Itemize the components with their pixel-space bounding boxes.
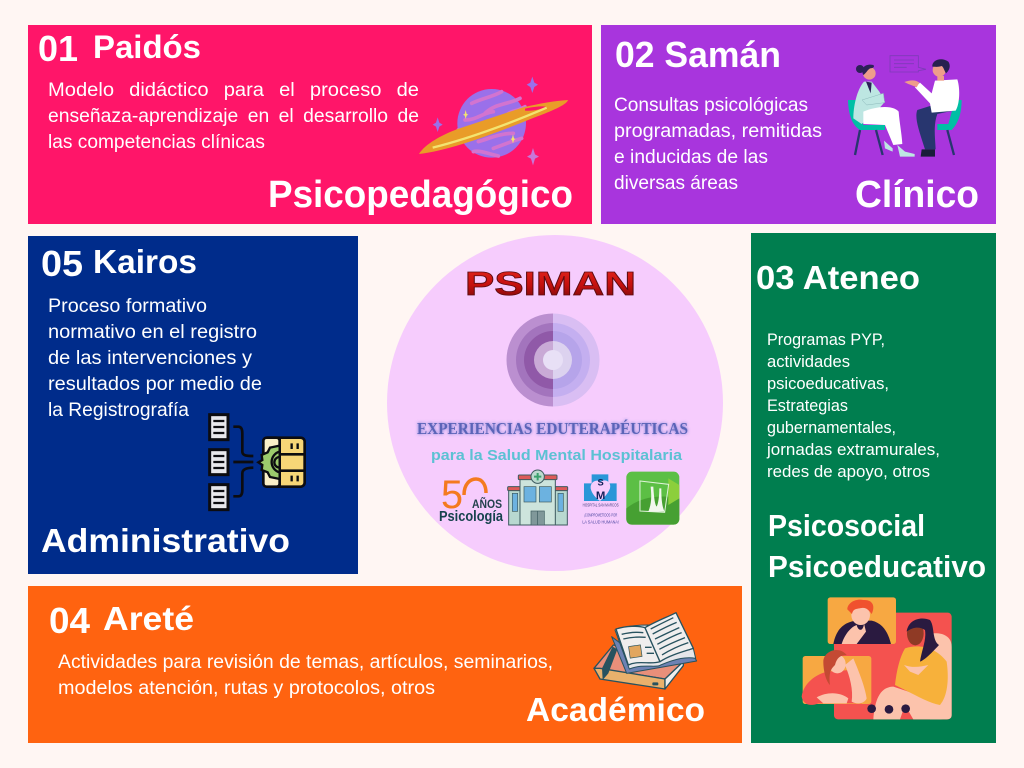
panel: 02 Samán bbox=[601, 25, 996, 224]
text: Ateneo description: redes de apoyo, otros bbox=[767, 463, 930, 481]
text: Ateneo description bbox=[766, 331, 940, 481]
text: Areté description: modelos atención, rutas y protocolos, otros bbox=[58, 678, 435, 699]
text: Paidós description: enseñaza-aprendizaje en el desarrollo de bbox=[48, 106, 419, 127]
label: Psicosocial Psicoeducativo: Psicoeducativo bbox=[768, 549, 986, 584]
label: Psicopedagógico: Psicopedagógico bbox=[268, 174, 573, 216]
heading: 04 Areté: Areté bbox=[103, 600, 194, 637]
icon: hospital building bbox=[508, 470, 568, 525]
logo: PSIMAN wordmark: PSIMAN bbox=[465, 265, 636, 302]
text: Kairos description bbox=[48, 296, 262, 421]
text: Samán description bbox=[614, 95, 822, 194]
logo: 50 años Psicología: AÑOS bbox=[472, 498, 502, 511]
heading: 05 Kairos: 05 bbox=[41, 243, 83, 284]
text: Paidós description: las competencias clínicas bbox=[48, 132, 265, 153]
label: Administrativo: Administrativo bbox=[41, 522, 290, 559]
text: Kairos description: de las intervenciones y bbox=[48, 348, 253, 369]
text: Paidós description bbox=[48, 80, 419, 153]
logo: Hospital San Marcos: M bbox=[596, 490, 605, 502]
text: Ateneo description: jornadas extramurales, bbox=[766, 441, 940, 459]
heading: 02 Samán: 02 Samán bbox=[615, 34, 781, 75]
label: Psicosocial Psicoeducativo bbox=[768, 508, 986, 584]
text: Ateneo description: actividades bbox=[767, 353, 850, 371]
text: Ateneo description: psicoeducativas, bbox=[767, 375, 889, 393]
text: Kairos description: Proceso formativo bbox=[48, 296, 207, 317]
logo: 50 años Psicología bbox=[439, 473, 504, 525]
icon: therapy conversation bbox=[848, 56, 962, 157]
central circle: PSIMAN logo bbox=[387, 235, 723, 571]
heading: 03 Ateneo: 03 Ateneo bbox=[756, 259, 920, 296]
text: Ateneo description: Programas PYP, bbox=[767, 331, 885, 349]
text: Ateneo description: gubernamentales, bbox=[767, 419, 896, 437]
text: Kairos description: la Registrografía bbox=[48, 400, 189, 421]
text: Kairos description: resultados por medio de bbox=[48, 374, 262, 395]
label: Psicosocial Psicoeducativo: Psicosocial bbox=[768, 508, 925, 543]
logo: Hospital San Marcos: ¡COMPROMETIDOS POR bbox=[584, 513, 617, 518]
subtitle: Experiencias Eduterapéuticas: EXPERIENCIAS EDUTERAPÉUTICAS bbox=[417, 419, 688, 438]
logo: Hospital San Marcos: LA SALUD HUMANA! bbox=[582, 519, 619, 524]
label: Clínico: Clínico bbox=[855, 174, 979, 216]
label: Académico: Académico bbox=[526, 691, 705, 728]
subtitle: para la Salud Mental Hospitalaria: para la Salud Mental Hospitalaria bbox=[431, 447, 683, 464]
heading: 05 Kairos: Kairos bbox=[93, 243, 197, 280]
emblem: concentric circles bbox=[506, 314, 600, 406]
text: Samán description: diversas áreas bbox=[614, 173, 738, 194]
subtitle: Experiencias Eduterapéuticas: EXPERIENCIAS EDUTERAPÉUTICAS bbox=[417, 419, 688, 438]
logo: Hospital San Marcos: HOSPITAL SAN MARCOS bbox=[583, 503, 619, 509]
text: Paidós description: Modelo didáctico para el proceso de bbox=[48, 80, 419, 101]
logo: Hospital San Marcos bbox=[582, 474, 619, 524]
logo: 50 años Psicología: 5 bbox=[441, 473, 463, 517]
logo: green app tile bbox=[626, 472, 679, 525]
text: Ateneo description: Estrategias bbox=[767, 397, 848, 415]
icon: ringed planet bbox=[419, 77, 568, 165]
heading: 04 Areté bbox=[49, 600, 194, 641]
heading: 01 Paidós: 01 bbox=[38, 28, 78, 69]
heading: 05 Kairos bbox=[41, 243, 197, 284]
icon: documents to data server bbox=[210, 415, 305, 510]
text: Samán description: e inducidas de las bbox=[614, 147, 768, 168]
icon: open book on closed book bbox=[594, 613, 697, 689]
text: Areté description bbox=[58, 652, 553, 699]
panel: 03 Ateneo bbox=[751, 233, 996, 743]
heading: 01 Paidós bbox=[38, 28, 201, 69]
text: Areté description: Actividades para revisión de temas, artículos, seminarios, bbox=[58, 652, 553, 673]
text: Samán description: programadas, remitidas bbox=[614, 121, 822, 142]
panel: 04 Areté bbox=[28, 586, 742, 743]
text: Samán description: Consultas psicológicas bbox=[614, 95, 808, 116]
panel: 01 Paidós bbox=[28, 25, 592, 224]
logo: 50 años Psicología: Psicología bbox=[439, 508, 504, 525]
heading: 01 Paidós: Paidós bbox=[93, 29, 201, 65]
heading: 04 Areté: 04 bbox=[49, 600, 90, 641]
text: Kairos description: normativo en el registro bbox=[48, 322, 257, 343]
illustration: video call bbox=[802, 597, 952, 719]
panel: 05 Kairos bbox=[28, 236, 358, 574]
logo: Hospital San Marcos: S bbox=[598, 478, 604, 488]
